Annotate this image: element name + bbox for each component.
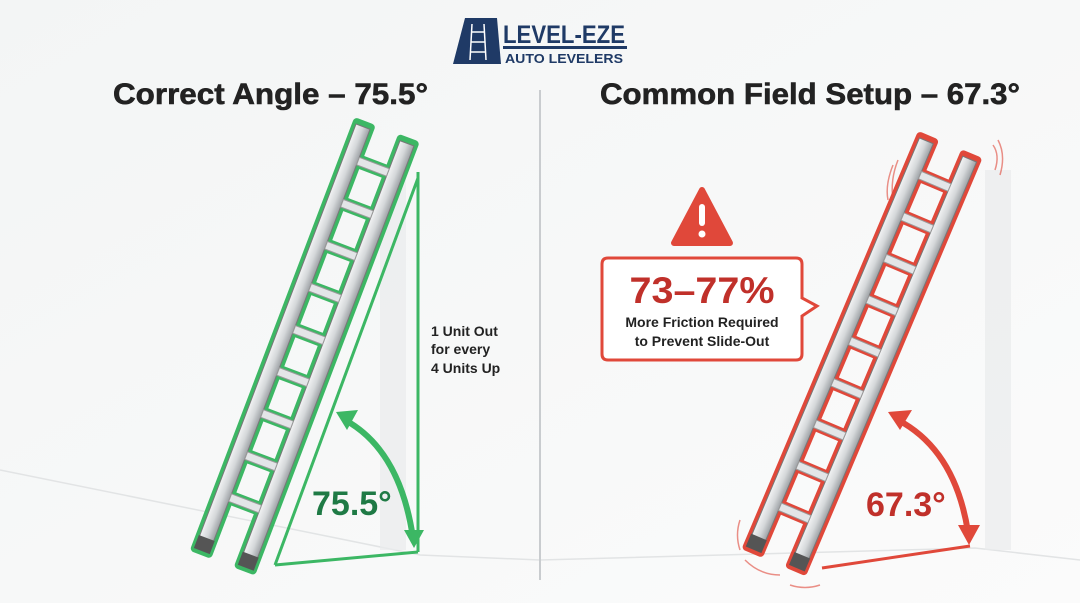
right ladder [741, 131, 983, 576]
logo: AUTO LEVELERS [505, 51, 623, 66]
logo: LEVEL-EZE [503, 21, 625, 49]
left side note [431, 323, 500, 376]
logo [453, 18, 627, 66]
left angle arrow [336, 410, 424, 548]
left side note: for every [431, 341, 490, 357]
right angle label: 67.3° [866, 486, 946, 524]
callout [602, 258, 817, 360]
left triangle [275, 172, 418, 565]
right angle arrow [888, 410, 980, 545]
left side note: 1 Unit Out [431, 323, 498, 339]
left ladder [190, 117, 420, 576]
title right: Common Field Setup – 67.3° [600, 78, 1020, 111]
callout: More Friction Required [625, 314, 779, 330]
left angle label: 75.5° [312, 485, 392, 523]
title left: Correct Angle – 75.5° [113, 78, 428, 111]
right triangle [822, 546, 970, 568]
callout: to Prevent Slide-Out [635, 333, 770, 349]
callout: 73–77% [630, 270, 774, 311]
shake marks [738, 140, 1003, 588]
warning icon [674, 190, 730, 243]
left side note: 4 Units Up [431, 360, 500, 376]
